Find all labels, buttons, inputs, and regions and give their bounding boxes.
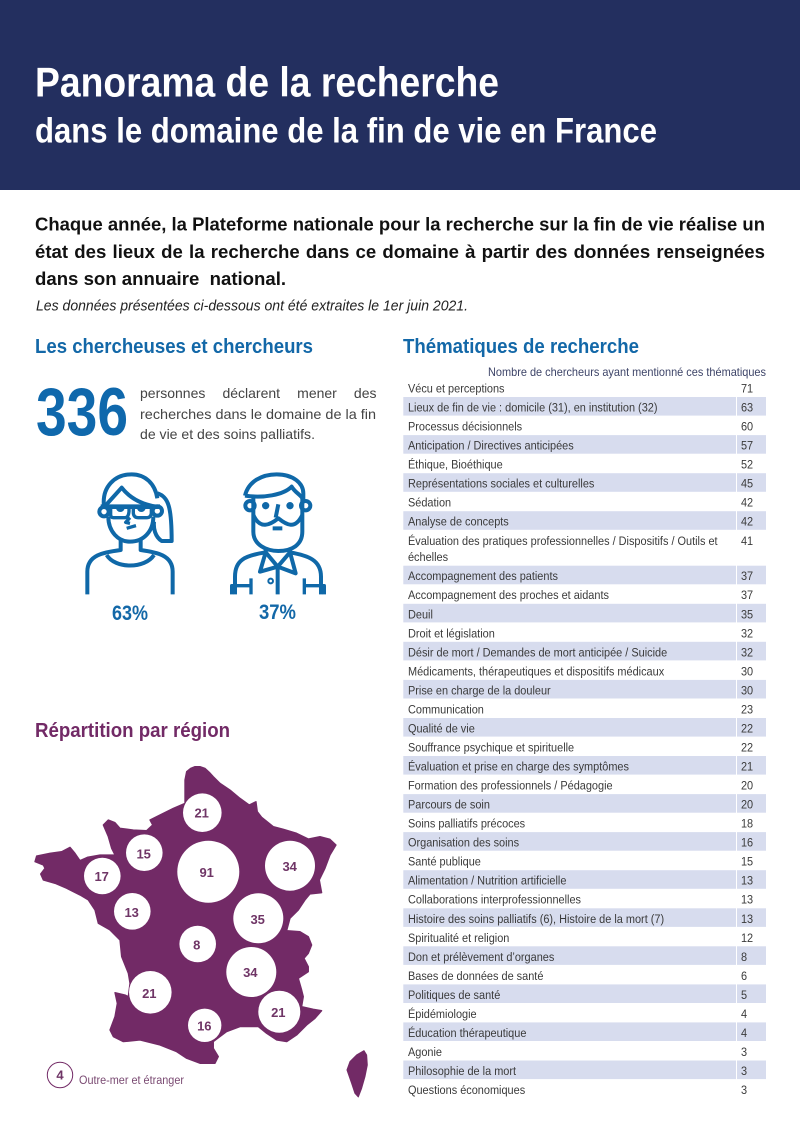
row: 63 [741,402,753,415]
row: échelles [408,552,448,564]
intro paragraph: Chaque année, la Plateforme nationale pour la recherche sur la fin de vie réalise un [35,214,765,234]
heading: researchers: Les chercheuses et chercheurs [35,336,313,358]
region values: 34 [282,859,298,874]
row: 15 [741,856,753,869]
row: Philosophie de la mort [408,1066,517,1078]
row: 52 [741,459,753,472]
region values: 91 [199,865,214,880]
row: 20 [741,799,753,812]
row [403,946,766,965]
region values: 13 [124,905,139,920]
row: 21 [741,761,753,774]
row [403,718,766,737]
region bubbles [84,793,315,1042]
row: Sédation [408,497,451,510]
title: Panorama de la recherche [35,59,499,106]
row: 13 [741,913,753,926]
row: Souffrance psychique et spirituelle [408,742,574,755]
heading: research themes: Thématiques de recherche [403,336,639,358]
researchers description: de vie et des soins palliatifs. [140,426,315,442]
intro paragraph [35,214,765,289]
row: 4 [741,1009,747,1021]
row: 16 [741,837,753,850]
row [403,680,766,698]
row: Lieux de fin de vie : domicile (31), en institution (32) [408,402,658,415]
row: Parcours de soin [408,799,490,812]
row: Analyse de concepts [408,516,509,529]
row [403,473,766,492]
row [408,458,753,472]
overseas legend [47,1062,184,1088]
row: Don et prélèvement d’organes [408,951,555,964]
row: Éducation thérapeutique [408,1027,526,1040]
row: Qualité de vie [408,723,475,736]
row: 30 [741,666,753,679]
row: 5 [741,990,747,1002]
row: Questions économiques [408,1085,525,1097]
region values: 21 [142,986,157,1001]
Corsica [347,1051,367,1097]
map of France [35,767,367,1097]
row: 32 [741,647,753,659]
heading: regional distribution: Répartition par région [35,720,230,742]
mainland outline [35,767,336,1063]
row: 3 [741,1085,747,1097]
row: 8 [741,951,747,964]
row: Accompagnement des patients [408,571,558,583]
row [408,421,753,434]
region values [94,806,298,1034]
row: 13 [741,894,753,907]
row: Processus décisionnels [408,421,522,434]
row [408,894,753,907]
row: 20 [741,780,753,793]
row: Anticipation / Directives anticipées [408,440,574,453]
row: 13 [741,875,753,888]
women percentage: 63% [112,602,148,625]
row [403,756,766,775]
row: Droit et législation [408,628,495,640]
row: Évaluation des pratiques professionnelles / Dispositifs / Outils et [408,535,718,548]
row: 32 [741,628,753,640]
row [403,984,766,1003]
row [403,642,766,660]
row: Prise en charge de la douleur [408,685,551,698]
researchers description: recherches dans le domaine de la fin [140,406,376,422]
row [403,397,766,416]
region values: 16 [197,1018,212,1034]
row [403,566,766,584]
row: Histoire des soins palliatifs (6), Histoire de la mort (7) [408,913,664,926]
row: 42 [741,497,753,510]
row: Agonie [408,1047,442,1059]
row: Évaluation et prise en charge des symptômes [408,760,629,774]
row: Deuil [408,609,433,621]
row: Formation des professionnels / Pédagogie [408,780,613,793]
row: Éthique, Bioéthique [408,458,503,472]
row [408,780,753,793]
row: Désir de mort / Demandes de mort anticipée / Suicide [408,647,667,659]
row: 3 [741,1047,747,1059]
row: 18 [741,818,753,831]
overseas legend: 4 [56,1068,64,1082]
region values: 21 [194,806,209,820]
column caption: Nombre de chercheurs ayant mentionné ces thématiques [488,365,766,379]
row [408,1085,747,1097]
region values: 15 [136,846,151,862]
row: Épidémiologie [408,1008,477,1021]
row: 22 [741,742,753,755]
row: Alimentation / Nutrition artificielle [408,875,566,888]
row [403,794,766,813]
row: 3 [741,1066,747,1078]
row: 57 [741,440,753,453]
row [408,1047,747,1059]
row: Représentations sociales et culturelles [408,478,595,491]
row [403,435,766,454]
region values: 8 [193,938,200,952]
row: Santé publique [408,856,481,869]
researchers description [140,385,376,442]
row: Spiritualité et religion [408,932,509,945]
row: 6 [741,971,747,983]
row [408,1008,747,1021]
row: 35 [741,609,753,621]
big number 336: 336 [36,374,128,450]
row: 37 [741,571,753,583]
row [408,535,753,564]
region values: 21 [271,1005,286,1020]
region values: 35 [250,912,265,927]
row [403,832,766,851]
title: dans le domaine de la fin de vie en France [35,112,657,151]
row: 30 [741,685,753,698]
overseas legend: Outre-mer et étranger [79,1075,184,1087]
intro paragraph: état des lieux de la recherche dans ce domaine à partir des données renseignées [35,241,765,262]
row [408,932,753,945]
themes table [403,383,766,1097]
row: Vécu et perceptions [408,383,505,396]
row: 4 [741,1028,747,1040]
row: 41 [741,536,753,548]
row [403,870,766,889]
row: Médicaments, thérapeutiques et dispositifs médicaux [408,666,664,679]
row: Politiques de santé [408,990,500,1002]
row [403,1060,766,1079]
row [403,908,766,927]
row: Collaborations interprofessionnelles [408,894,581,907]
row [408,818,753,831]
row [408,704,753,717]
researchers description: personnes déclarent mener des [140,385,376,401]
row: 23 [741,704,753,717]
row: 60 [741,421,753,434]
row [408,497,753,510]
row [408,628,753,640]
icon: woman [87,474,173,594]
icon: man [232,474,324,594]
row: Soins palliatifs précoces [408,818,525,831]
row [408,590,753,602]
row [408,742,753,755]
row: 42 [741,516,753,529]
region values: 17 [94,869,109,884]
row [408,383,753,396]
row: 71 [741,383,753,396]
row [408,971,747,983]
row [403,1022,766,1041]
header banner [0,0,800,190]
row: Bases de données de santé [408,971,543,983]
men percentage: 37% [259,601,296,624]
date note: Les données présentées ci-dessous ont été extraites le 1er juin 2021. [36,298,468,314]
row: 12 [741,932,753,945]
row: Accompagnement des proches et aidants [408,590,609,602]
row: Communication [408,704,484,717]
region values: 34 [243,965,258,980]
row [403,604,766,622]
row: 45 [741,478,753,491]
row: Organisation des soins [408,837,519,850]
row [408,856,753,869]
intro paragraph: dans son annuaire national. [35,268,286,289]
title [35,59,657,151]
row [403,511,766,530]
row: 37 [741,590,753,602]
row: 22 [741,723,753,736]
